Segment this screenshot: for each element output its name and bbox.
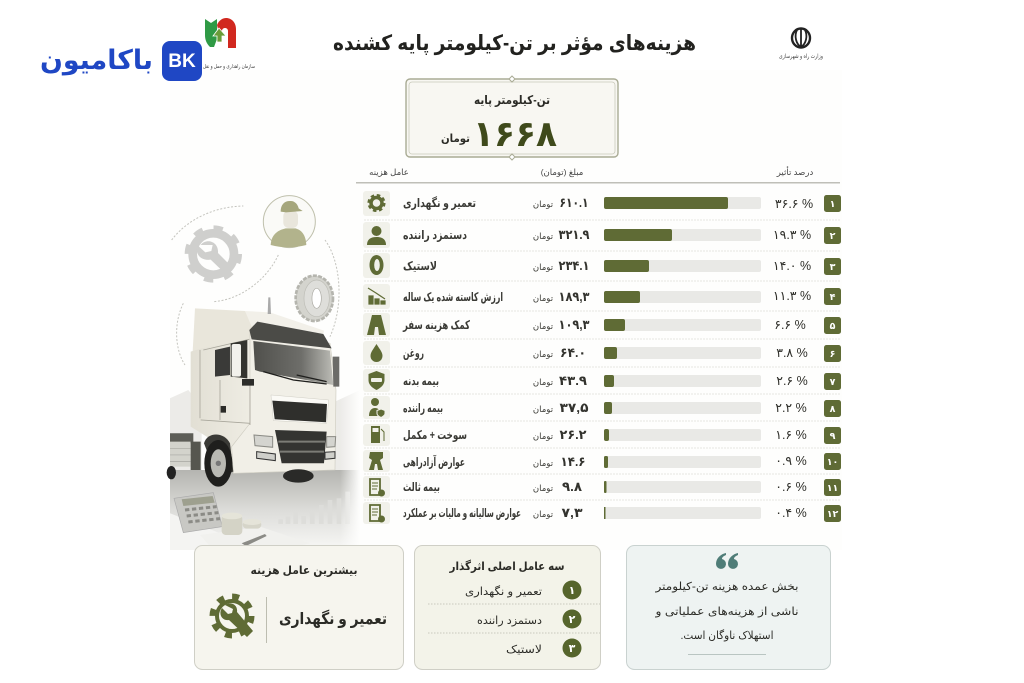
coins [222,513,267,546]
logo: road maintenance organization: سازمان راهداری و حمل و نقل [203,64,255,70]
row 6: روغن [403,346,424,361]
row 4 [363,284,841,309]
row 10: ۱۴.۶ [560,454,586,469]
row 8: ۳۷,۵ [560,400,589,415]
panel: top cost factor [194,546,404,670]
panel: three main factors [414,546,600,670]
row 6: ۶ [830,349,835,360]
row 10 [363,450,841,472]
row 10: عوارض آزادراهی [403,454,465,470]
icon: dashed arcs [172,206,339,365]
logo: road maintenance organization [203,18,255,70]
row 8: تومان [533,404,554,414]
row 8: ۲.۲ % [775,401,807,415]
row 12: ۰.۴ % [775,506,807,520]
row 4: ۴ [830,292,836,303]
row 7: ۲.۶ % [776,374,808,388]
bar graphic [278,492,350,524]
row 6: ۳.۸ % [776,346,808,360]
row 9: ۹ [830,431,836,442]
truck cab [191,297,339,487]
row 12: عوارض سالیانه و مالیات بر عملکرد [403,506,521,521]
row 9: تومان [533,431,554,441]
item 2: ۲ [569,614,576,626]
row 4: ارزش کاسته شده یک ساله [403,290,503,304]
row 11: ۹.۸ [562,479,582,494]
row 1 [363,191,841,216]
row 1: ۳۶.۶ % [775,197,813,211]
row 10: ۰.۹ % [775,454,807,468]
row 8: ۸ [830,404,836,415]
table row separators [364,220,840,500]
horizon scenery [170,390,360,473]
row 6: ۶۴.۰ [560,345,586,360]
item 1 [465,580,582,600]
row 5 [363,313,841,337]
panel: base rate: ۱۶۶۸ [473,113,557,154]
row 11 [363,476,841,498]
panel: quote [626,546,830,670]
item 3: ۳ [569,643,576,655]
logo: ministry emblem: وزارت راه و شهرسازی [779,53,823,60]
row 1: تومان [533,199,554,209]
row 3: ۱۴.۰ % [773,259,811,273]
row 11: بیمه ثالث [403,480,440,494]
illustration: truck scene [167,196,360,550]
row 9 [363,424,841,446]
row 12: تومان [533,509,554,519]
panel: quote: ناشی از هزینه‌های عملیاتی و [654,606,798,618]
row 4: ۱۱.۳ % [773,289,811,303]
background paper [170,70,842,550]
row 9: ۲۶.۲ [560,427,587,442]
table header: درصد تأثیر [776,166,813,177]
row 11: تومان [533,483,554,493]
row 7: بیمه بدنه [403,374,439,388]
road [170,470,360,550]
calculator [174,493,222,533]
row 5: ۱۰۹,۳ [558,317,590,332]
row 1: تعمیر و نگهداری [403,196,476,211]
panel: quote: بخش عمده هزینه تن-کیلومتر [654,581,798,593]
row 2: ۲ [830,231,836,242]
row 2: تومان [533,231,554,241]
panel: three main factors: سه عامل اصلی اثرگذار [449,559,564,573]
row 7: ۴۳.۹ [559,373,587,388]
row 12 [363,502,841,524]
row 7: ۷ [830,377,836,388]
row 7 [363,369,841,392]
row 2: ۳۲۱.۹ [558,227,590,242]
logo: BaKamioun: BK [168,51,196,72]
row 5: ۶.۶ % [774,318,806,332]
row 12: ۷,۳ [562,505,583,520]
row 2: ۱۹.۳ % [773,228,811,242]
row 8: بیمه راننده [403,401,443,415]
panel: quote: استهلاک ناوگان است. [680,629,774,642]
item 3: لاستیک [506,644,542,656]
truck chassis [167,433,201,479]
item 1: تعمیر و نگهداری [465,585,542,598]
row 6: تومان [533,349,554,359]
row 3: ۳ [830,262,836,273]
item 2: دستمزد راننده [477,615,542,627]
item 2 [477,610,582,628]
panel: base rate: تن-کیلومتر پایه [474,93,550,108]
row 2: دستمزد راننده [403,228,467,242]
icon: tire [296,276,333,321]
item 3 [506,638,582,658]
icon: driver [263,196,315,248]
row 10: ۱۰ [827,457,838,468]
table rows [363,191,841,524]
row 11: ۱۱ [827,483,838,494]
row 1: ۶۱۰.۱ [560,195,588,210]
title: هزینه‌های مؤثر بر تن-کیلومتر پایه کشنده [333,32,696,55]
panel: top cost factor: تعمیر و نگهداری [279,609,387,628]
logo: BaKamioun: باکامیون [40,45,153,76]
row 7: تومان [533,377,554,387]
panel: base rate: تومان [441,133,470,145]
icon: quotation mark [716,553,738,569]
row 5: تومان [533,321,554,331]
row 4: تومان [533,293,554,303]
row 12: ۱۲ [827,509,838,520]
papers [170,513,247,550]
icon: gear and wrench [212,596,253,637]
row 5: کمک هزینه سفر [402,318,470,332]
item 1: ۱ [569,585,575,597]
panel: top cost factor: بیشترین عامل هزینه [250,565,358,577]
panel: base rate [406,76,618,160]
row 2 [363,222,841,248]
row 10: تومان [533,458,554,468]
table header: عامل هزینه [369,167,409,177]
table header [356,166,840,184]
row 3: لاستیک [403,259,437,273]
row 6 [363,341,841,365]
row 8 [363,396,841,419]
row 3: ۲۳۴.۱ [558,258,590,273]
scene right fade [340,380,360,550]
icon: gear [187,228,239,280]
row 3 [363,253,841,278]
row 11: ۰.۶ % [775,480,807,494]
logo: BaKamioun [40,41,202,81]
row 9: ۱.۶ % [775,428,807,442]
row 9: سوخت + مکمل [403,428,467,443]
row 4: ۱۸۹,۳ [558,289,590,304]
row 1: ۱ [830,199,835,210]
table header: مبلغ (تومان) [541,167,583,177]
row 3: تومان [533,262,554,272]
logo: ministry emblem [779,28,823,60]
row 5: ۵ [830,321,836,332]
